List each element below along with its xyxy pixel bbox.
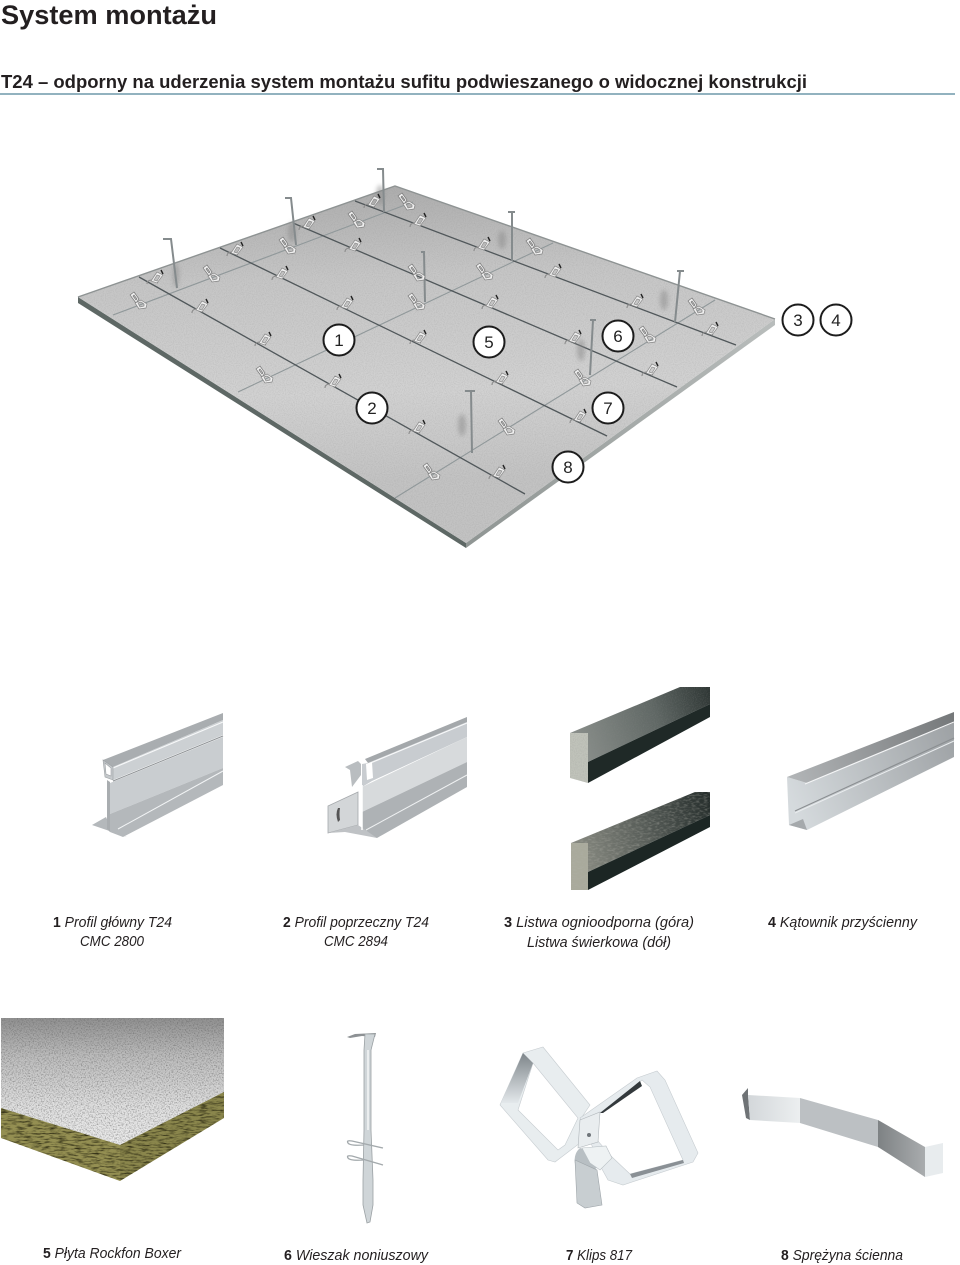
callout 1 <box>324 324 354 356</box>
captions row 1 <box>53 914 918 951</box>
main profiles <box>139 201 736 494</box>
product: main profile T24 <box>92 713 223 837</box>
callout 6 <box>602 320 634 352</box>
caption 3: 3 Listwa ognioodporna (góra) <box>504 914 694 931</box>
caption 1: CMC 2800 <box>80 933 145 950</box>
product: cross profile T24 <box>328 717 467 838</box>
panel edge: right side <box>466 319 775 548</box>
callout 8: 8 <box>563 458 573 477</box>
hangers <box>163 169 684 453</box>
caption 4: 4 Kątownik przyścienny <box>768 914 918 931</box>
caption 8: 8 Sprężyna ścienna <box>781 1247 903 1264</box>
caption 1 <box>53 914 172 950</box>
callout 5 <box>474 326 504 358</box>
callout 3 <box>782 304 814 336</box>
callout 1: 1 <box>334 331 344 350</box>
caption 2: 2 Profil poprzeczny T24 <box>283 914 429 931</box>
product: spruce batten (bottom) <box>571 792 710 890</box>
product: vernier hanger <box>347 1033 383 1223</box>
caption 6: 6 Wieszak noniuszowy <box>284 1247 429 1264</box>
cross profiles <box>113 202 715 498</box>
ceiling panel surface <box>78 186 775 543</box>
subtitle rule <box>0 93 955 95</box>
callout 2 <box>356 392 388 424</box>
panel edge: left side <box>78 297 466 548</box>
product: Rockfon Boxer board <box>1 1018 224 1181</box>
product: wall angle <box>787 712 954 830</box>
callout 4: 4 <box>831 311 841 330</box>
hanger shadows <box>173 185 668 436</box>
captions row 2 <box>43 1245 903 1264</box>
caption 5: 5 Płyta Rockfon Boxer <box>43 1245 182 1262</box>
callout 5: 5 <box>484 333 494 352</box>
caption 3 <box>504 914 694 951</box>
caption 1: 1 Profil główny T24 <box>53 914 172 931</box>
panel perimeter angle <box>78 186 775 319</box>
clips on cross profiles <box>130 193 705 480</box>
callout 7: 7 <box>603 399 613 418</box>
caption 7: 7 Klips 817 <box>566 1247 633 1264</box>
caption 3: Listwa świerkowa (dół) <box>527 934 671 951</box>
subtitle: T24 – odporny na uderzenia system montażu sufitu podwieszanego o widocznej konstrukcji <box>1 72 807 92</box>
callout 8 <box>552 452 584 482</box>
callout 7 <box>592 392 624 424</box>
product: clip 817 <box>500 1047 698 1208</box>
title: System montażu <box>1 0 217 30</box>
ceiling system diagram <box>78 169 852 548</box>
product: wall spring <box>742 1088 943 1177</box>
product: fireproof batten (top) <box>570 687 710 783</box>
clips on main profiles <box>147 194 718 479</box>
callout 2: 2 <box>367 399 377 418</box>
callout 4 <box>820 304 852 336</box>
callout 3: 3 <box>793 311 803 330</box>
caption 2: CMC 2894 <box>324 933 388 950</box>
callout 6: 6 <box>613 327 623 346</box>
caption 2 <box>283 914 429 950</box>
